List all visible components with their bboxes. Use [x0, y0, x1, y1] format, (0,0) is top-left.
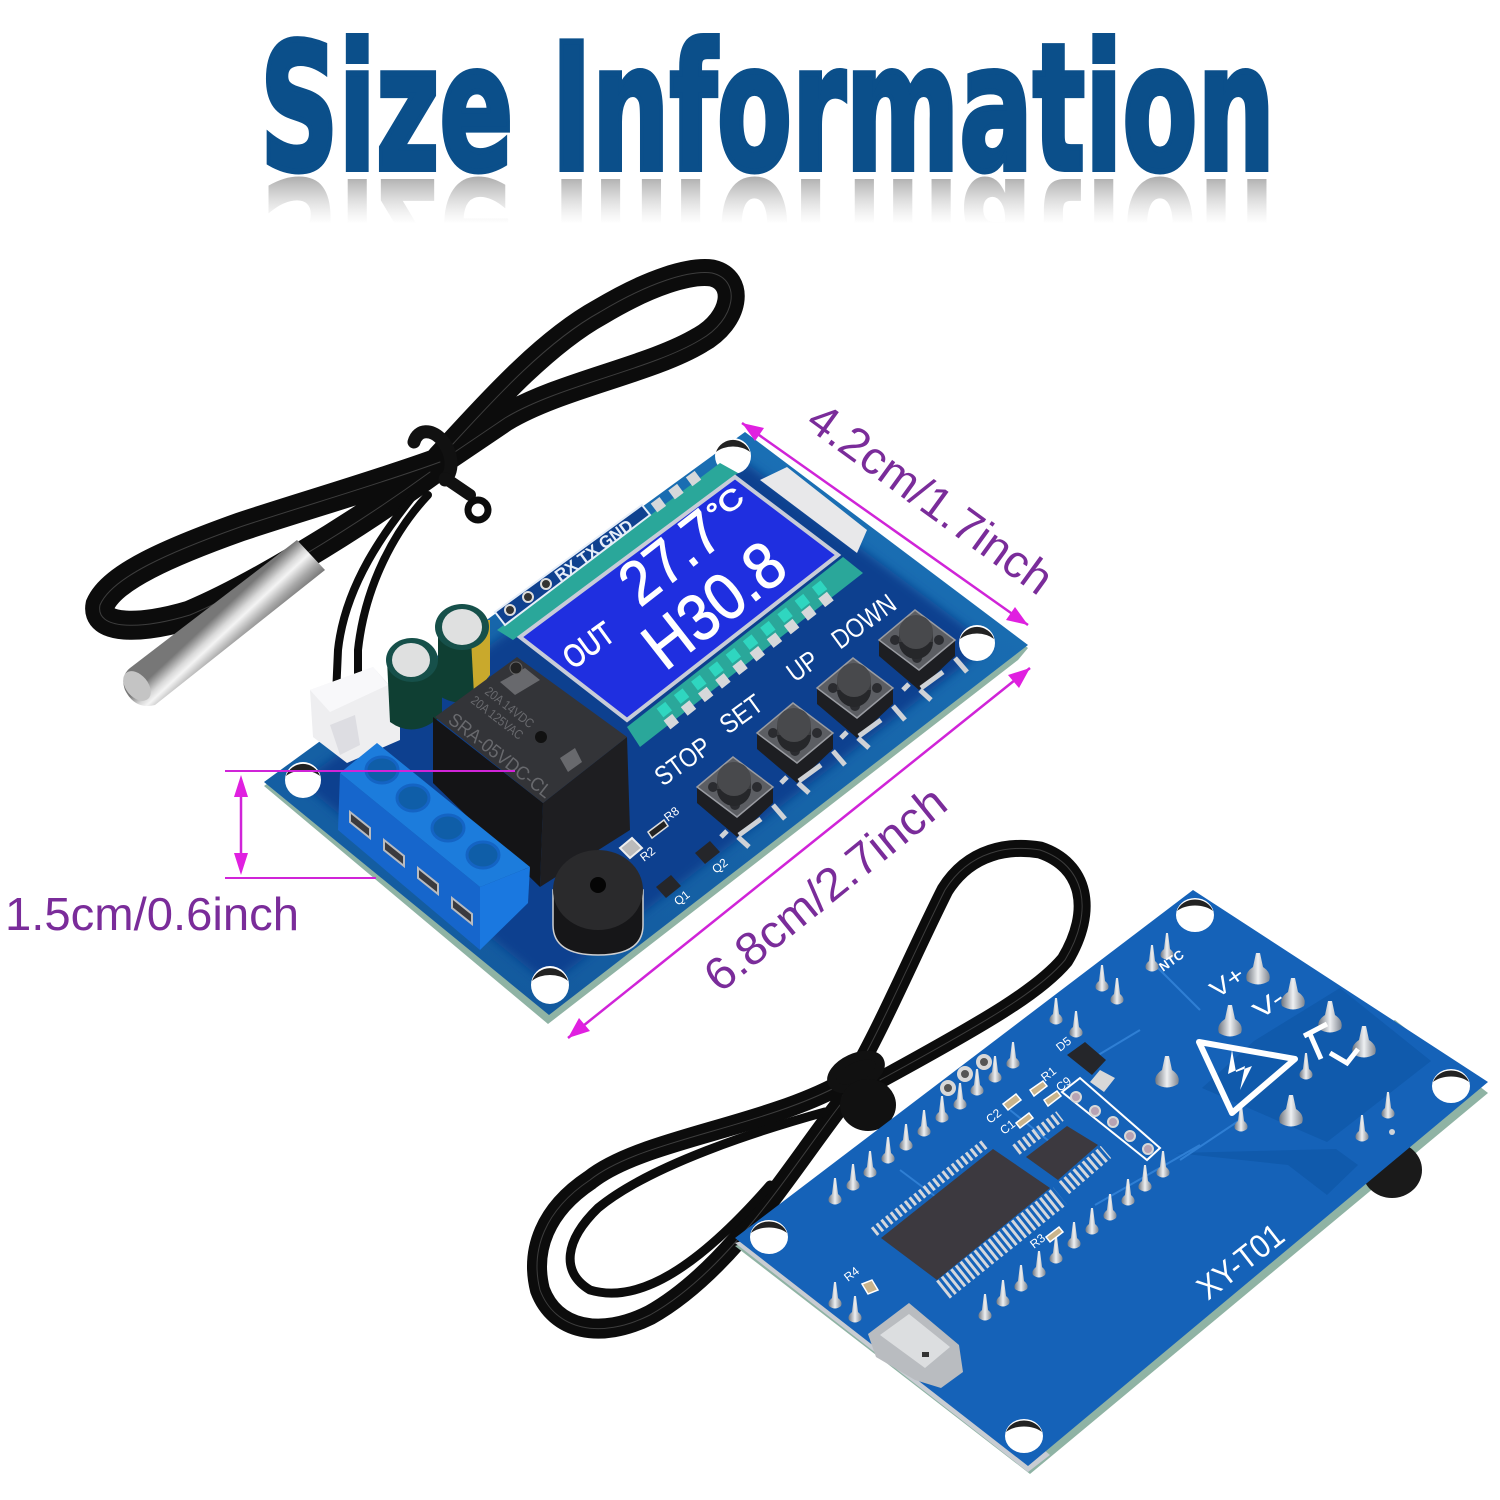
back of buzzer	[1362, 1142, 1422, 1198]
white sensor connector	[310, 667, 400, 763]
pin labels	[495, 505, 650, 625]
board print labels: R1	[1038, 1064, 1059, 1084]
buzzer	[553, 850, 643, 955]
top circuit board	[264, 432, 1028, 1024]
relay	[433, 657, 630, 887]
metal probe	[118, 540, 325, 706]
LCD display: OUT	[556, 615, 621, 676]
push buttons	[697, 610, 967, 847]
PCB traces	[900, 960, 1240, 1215]
solder pins	[828, 933, 1395, 1322]
button labels: SET	[714, 689, 769, 740]
title	[260, 8, 1275, 340]
relay copper zones	[1176, 988, 1431, 1195]
board print labels	[841, 946, 1290, 1284]
board print labels: C1	[997, 1117, 1018, 1137]
diode	[1067, 1042, 1115, 1092]
sensor cable and probe	[100, 273, 731, 706]
relay: 20A 125VAC	[468, 693, 526, 743]
terminal block	[338, 743, 530, 950]
board print labels: C9	[1053, 1074, 1074, 1094]
header pads	[942, 1056, 1160, 1160]
LCD display: °C	[701, 481, 750, 529]
LCD display: H30.8	[628, 526, 800, 683]
LCD display: 27.7	[606, 497, 735, 619]
button labels	[649, 588, 902, 792]
bottom sensor cable	[537, 848, 1082, 1329]
second chip	[1016, 1116, 1106, 1188]
height dimension: 1.5cm	[5, 771, 515, 940]
warning triangle icon	[1199, 1042, 1295, 1113]
relay symbol	[1304, 1024, 1358, 1063]
SMD components: Q2	[709, 855, 731, 876]
bottom circuit board	[735, 890, 1488, 1474]
capacitors	[386, 604, 490, 730]
SMD components	[620, 804, 731, 908]
SMD parts	[862, 1081, 1063, 1294]
model label: XY-T01	[1190, 1216, 1291, 1307]
board print labels: V+	[1205, 961, 1250, 1004]
height dimension: 1.5cm: 1.5cm/0.6inch	[5, 888, 299, 940]
board print labels: R4	[841, 1264, 862, 1284]
button labels: STOP	[649, 731, 717, 792]
board print labels: C2	[983, 1106, 1004, 1126]
micro USB port	[868, 1303, 963, 1388]
LCD pin rows	[654, 470, 838, 725]
main chip	[874, 1143, 1060, 1290]
length dimension: 6.8cm	[568, 668, 1030, 1038]
board print labels: V-	[1248, 984, 1290, 1025]
board print labels: R3	[1027, 1231, 1048, 1251]
width dimension: 4.2cm: 4.2cm/1.7inch	[798, 392, 1063, 605]
button labels: DOWN	[826, 588, 902, 655]
SMD components: R8	[661, 804, 682, 824]
SMD components: R2	[637, 844, 658, 864]
board print labels: D5	[1053, 1034, 1074, 1054]
pin labels: RX TX GND	[551, 516, 637, 585]
board print labels: NTC	[1156, 946, 1187, 974]
button labels: UP	[781, 645, 824, 688]
mounting holes	[750, 898, 1470, 1453]
mounting holes	[285, 438, 995, 1004]
relay: SRA-05VDC-CL	[444, 709, 555, 803]
length dimension: 6.8cm: 6.8cm/2.7inch	[694, 775, 956, 1002]
relay: 20A 14VDC	[482, 684, 537, 731]
SMD components: Q1	[671, 887, 693, 908]
LCD display	[497, 463, 867, 747]
